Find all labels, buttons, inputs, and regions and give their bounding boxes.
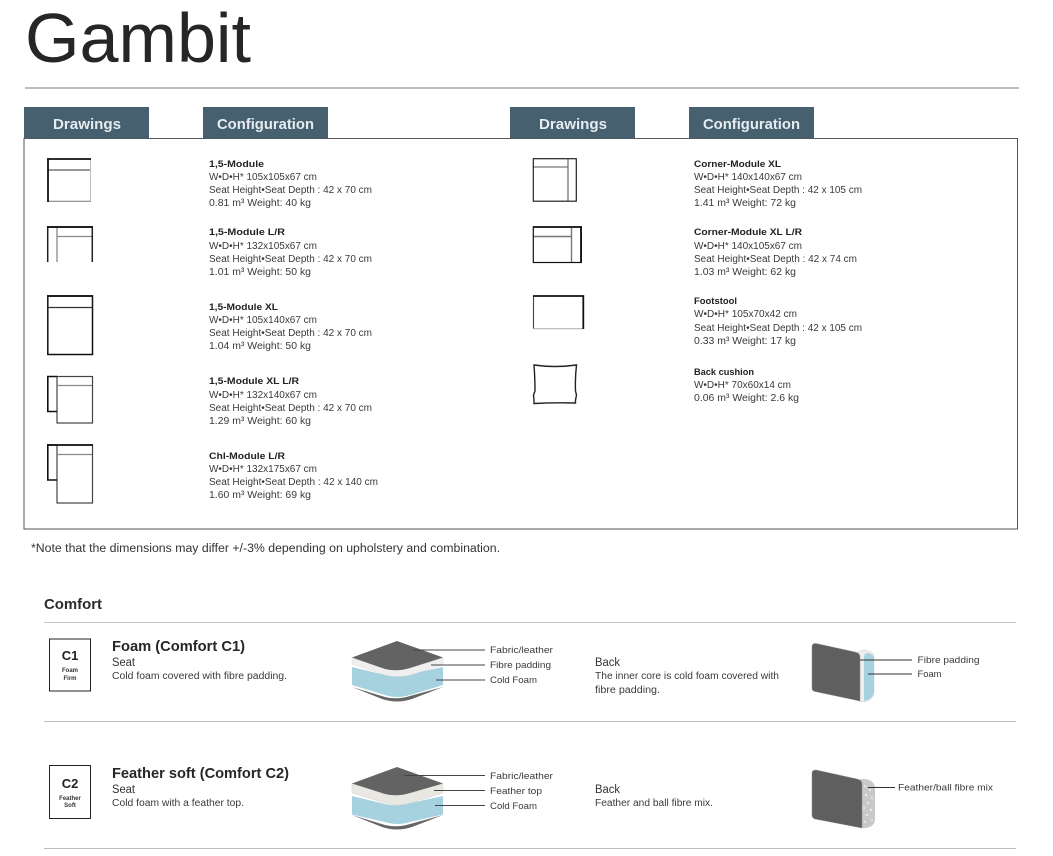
badge: C1: Firm [63, 676, 77, 682]
text: Chl-Module L/R [209, 451, 378, 501]
badge: C2: Feather [59, 796, 81, 802]
text: Corner-Module XL: Corner-Module XL [694, 159, 781, 170]
icon: 1,5-Module drawing [47, 158, 91, 202]
text: Feather back: Back [595, 784, 620, 796]
icon: Back cushion drawing [534, 365, 576, 404]
badge: C1 [50, 639, 90, 691]
icon: 1,5-Module XL drawing [47, 296, 93, 354]
text: Corner-Module XL L/R: Seat Height•Seat Depth : 42 x 74 cm [694, 254, 857, 265]
labels: C2 seat layers: Feather top [490, 786, 542, 797]
text: Feather soft seat [112, 765, 289, 809]
text: Foam back: fibre padding. [595, 685, 660, 696]
icon: Chl-Module L/R drawing [47, 445, 93, 503]
text: Foam back [595, 657, 779, 696]
text: Feather soft seat: Cold foam with a feather top. [112, 798, 244, 809]
text: Foam back: Back [595, 657, 620, 669]
icon: 1,5-Module L/R drawing [47, 227, 93, 262]
panel: specification table [24, 138, 1018, 529]
text: Foam seat: Foam (Comfort C1) [112, 638, 245, 655]
text: 1,5-Module XL L/R: 1.29 m³ Weight: 60 kg [209, 416, 311, 427]
text: 1,5-Module L/R: 1.01 m³ Weight: 50 kg [209, 267, 311, 278]
tab: drawings right [510, 107, 635, 138]
text: 1,5-Module XL L/R: 1,5-Module XL L/R [209, 376, 299, 387]
text: 1,5-Module XL L/R [209, 376, 372, 427]
text: Chl-Module L/R: W•D•H* 132x175x67 cm [209, 464, 317, 475]
title: Gambit [25, 0, 251, 77]
text: Foam seat: Cold foam covered with fibre padding. [112, 671, 287, 682]
text: Corner-Module XL: W•D•H* 140x140x67 cm [694, 172, 802, 183]
tab: drawings left: Drawings [53, 116, 121, 133]
illustration: C1 back cushion [812, 643, 874, 702]
tab: drawings right: Drawings [539, 116, 607, 133]
text: 1,5-Module XL: Seat Height•Seat Depth : 42 x 70 cm [209, 328, 372, 339]
text: Chl-Module L/R: Chl-Module L/R [209, 451, 285, 462]
text: Feather soft seat: Feather soft (Comfort C2) [112, 765, 289, 782]
text: Footstool: Footstool [694, 296, 737, 307]
icon: Corner-Module XL L/R drawing [533, 227, 582, 262]
illustration: C2 seat layers [352, 767, 443, 830]
label: C2 back cushion: Feather/ball fibre mix [898, 782, 993, 794]
labels: C1 seat layers: Fabric/leather [490, 645, 553, 656]
note: *Note that the dimensions may differ +/-3% depending on upholstery and combination. [31, 543, 500, 555]
tab: configuration left [203, 107, 328, 138]
illustration: C2 back cushion [812, 770, 875, 828]
text: Corner-Module XL [694, 159, 862, 209]
badge: C1: C1 [62, 648, 78, 663]
text: Back cushion: 0.06 m³ Weight: 2.6 kg [694, 393, 799, 404]
labels: C2 seat layers: Fabric/leather [490, 771, 553, 782]
tab: configuration right [689, 107, 814, 138]
text: 1,5-Module XL [209, 302, 372, 352]
text: Corner-Module XL: Seat Height•Seat Depth : 42 x 105 cm [694, 185, 862, 196]
text: Corner-Module XL L/R: 1.03 m³ Weight: 62 kg [694, 267, 796, 278]
text: 1,5-Module L/R: 1,5-Module L/R [209, 227, 285, 238]
text: Footstool: Seat Height•Seat Depth : 42 x 105 cm [694, 323, 862, 334]
labels: C1 back cushion: Fibre padding [918, 655, 980, 666]
text: Feather back [595, 784, 713, 809]
text: 1,5-Module L/R: W•D•H* 132x105x67 cm [209, 241, 317, 252]
icon: 1,5-Module XL L/R drawing [48, 376, 92, 423]
text: 1,5-Module L/R: Seat Height•Seat Depth : 42 x 70 cm [209, 254, 372, 265]
tab: configuration left: Configuration [217, 116, 314, 133]
text: 1,5-Module: 0.81 m³ Weight: 40 kg [209, 198, 311, 209]
text: 1,5-Module: W•D•H* 105x105x67 cm [209, 172, 317, 183]
labels: C1 seat layers: Cold Foam [490, 675, 537, 686]
text: Foam seat [112, 638, 287, 682]
labels: C1 seat layers: Fibre padding [490, 660, 551, 671]
illustration: C1 seat layers [352, 641, 443, 702]
text: 1,5-Module: 1,5-Module [209, 159, 264, 170]
text: Footstool [694, 296, 862, 347]
icon: Footstool drawing [533, 296, 583, 329]
text: Corner-Module XL L/R: W•D•H* 140x105x67 cm [694, 241, 802, 252]
text: 1,5-Module XL: 1.04 m³ Weight: 50 kg [209, 341, 311, 352]
labels: C2 seat layers: Cold Foam [490, 801, 537, 812]
badge: C2 [50, 766, 90, 818]
text: Back cushion [694, 367, 799, 404]
labels: C1 seat layers [413, 645, 553, 686]
text: Footstool: W•D•H* 105x70x42 cm [694, 309, 797, 320]
labels: C1 back cushion: Foam [918, 669, 942, 680]
text: 1,5-Module XL L/R: W•D•H* 132x140x67 cm [209, 390, 317, 401]
text: Footstool: 0.33 m³ Weight: 17 kg [694, 336, 796, 347]
text: Feather soft seat: Seat [112, 784, 136, 796]
badge: C2: Soft [64, 803, 76, 809]
text: Chl-Module L/R: 1.60 m³ Weight: 69 kg [209, 490, 311, 501]
icon: Corner-Module XL drawing [533, 159, 576, 201]
text: Corner-Module XL L/R [694, 227, 857, 278]
text: Feather back: Feather and ball fibre mix. [595, 798, 713, 809]
tab: configuration right: Configuration [703, 116, 800, 133]
badge: C1: Foam [62, 668, 78, 674]
text: Corner-Module XL: 1.41 m³ Weight: 72 kg [694, 198, 796, 209]
text: Chl-Module L/R: Seat Height•Seat Depth : 42 x 140 cm [209, 477, 378, 488]
text: Back cushion: Back cushion [694, 367, 754, 378]
text: Corner-Module XL L/R: Corner-Module XL L/R [694, 227, 802, 238]
tab: drawings left [24, 107, 149, 138]
text: 1,5-Module XL: W•D•H* 105x140x67 cm [209, 315, 317, 326]
text: 1,5-Module XL: 1,5-Module XL [209, 302, 278, 313]
labels: C1 back cushion [860, 655, 980, 680]
text: 1,5-Module L/R [209, 227, 372, 278]
badge: C2: C2 [62, 776, 78, 791]
text: 1,5-Module: Seat Height•Seat Depth : 42 x 70 cm [209, 185, 372, 196]
text: Foam back: The inner core is cold foam covered with [595, 671, 779, 682]
labels: C2 seat layers [404, 771, 553, 812]
text: 1,5-Module XL L/R: Seat Height•Seat Depth : 42 x 70 cm [209, 403, 372, 414]
heading: comfort: Comfort [44, 596, 102, 613]
text: Back cushion: W•D•H* 70x60x14 cm [694, 380, 791, 391]
text: 1,5-Module [209, 159, 372, 209]
text: Foam seat: Seat [112, 657, 136, 669]
